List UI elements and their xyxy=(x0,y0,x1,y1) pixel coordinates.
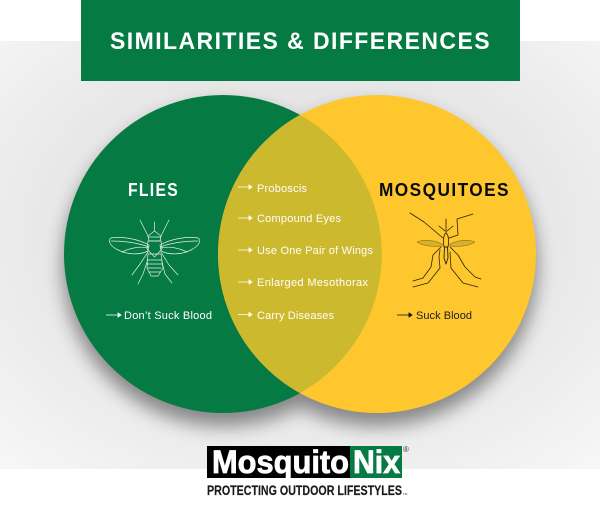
label: Don’t Suck Blood xyxy=(124,310,212,322)
arrow xyxy=(238,216,252,220)
arrow xyxy=(238,185,252,189)
label: Suck Blood xyxy=(416,310,472,322)
title: SIMILARITIES & DIFFERENCES xyxy=(110,28,491,55)
venn diagram xyxy=(64,95,536,413)
title banner xyxy=(81,0,520,81)
label: Carry Diseases xyxy=(257,310,334,322)
logo: MosquitoNix: Nix xyxy=(353,444,400,480)
logo: MosquitoNix: TM xyxy=(403,492,408,496)
mosquitoes difference xyxy=(397,310,472,322)
circle: flies xyxy=(64,95,382,413)
icon: fly xyxy=(109,220,200,284)
logo: MosquitoNix: Mosquito xyxy=(212,444,349,480)
label: Use One Pair of Wings xyxy=(257,245,374,257)
arrow xyxy=(397,313,412,317)
icon: mosquito xyxy=(410,213,481,287)
arrow xyxy=(106,313,121,317)
arrow xyxy=(238,280,252,284)
heading: mosquitoes: MOSQUITOES xyxy=(379,180,510,200)
logo: MosquitoNix: PROTECTING OUTDOOR LIFESTYLES xyxy=(207,483,402,498)
overlap: similarities xyxy=(218,115,382,393)
label: Enlarged Mesothorax xyxy=(257,277,368,289)
circle: mosquitoes xyxy=(218,95,536,413)
arrow xyxy=(238,248,252,252)
list: shared traits xyxy=(238,183,374,322)
logo: MosquitoNix: ® xyxy=(403,445,409,454)
logo: MosquitoNix xyxy=(207,444,409,498)
circle shadows xyxy=(63,106,537,426)
heading: flies: FLIES xyxy=(128,180,179,200)
arrow xyxy=(238,312,252,316)
flies difference xyxy=(106,310,212,322)
label: Compound Eyes xyxy=(257,213,342,225)
label: Proboscis xyxy=(257,183,308,195)
